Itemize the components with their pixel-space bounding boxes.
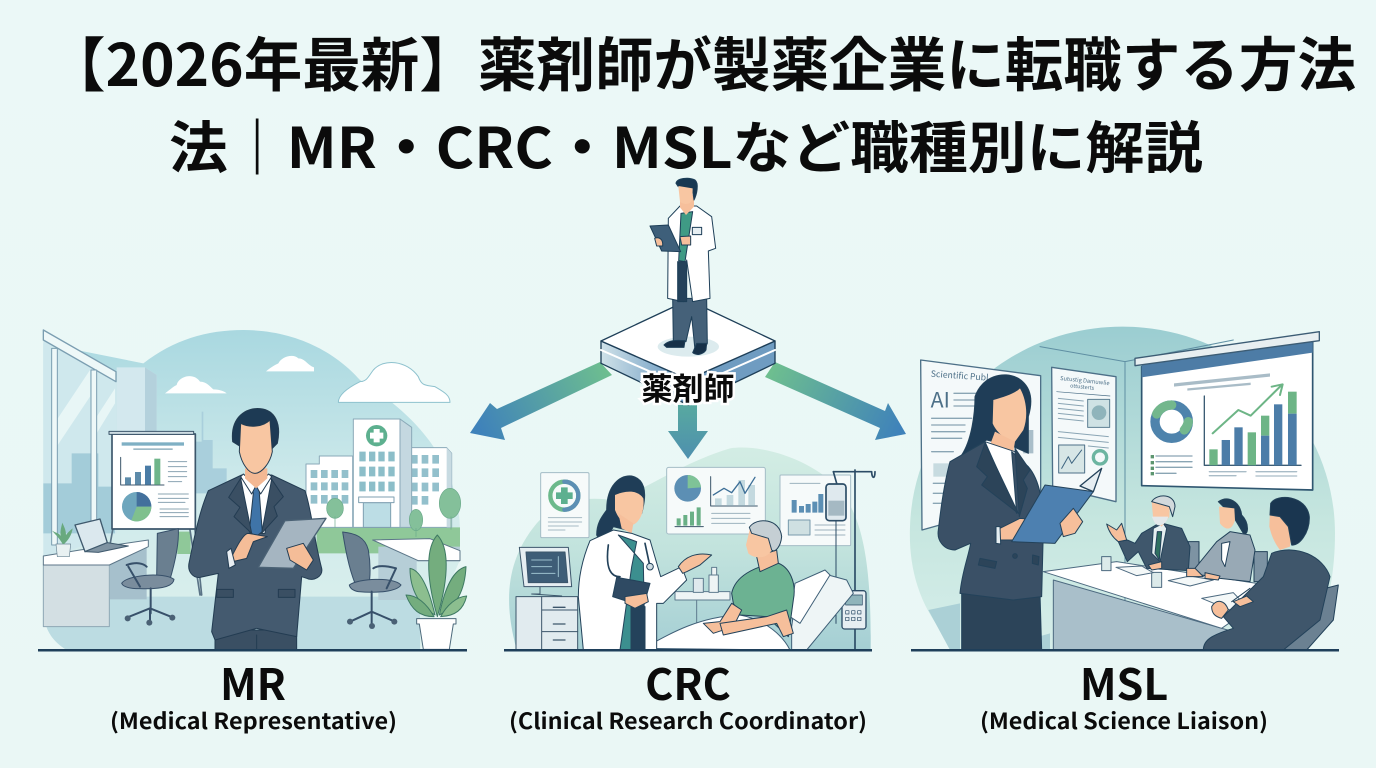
label: MSL: (Medical Science Liaison): [980, 704, 1268, 736]
title: [47, 18, 1356, 185]
backdrop blob: [43, 330, 460, 650]
lawn: [177, 527, 460, 554]
poster: second: ottusterts: [1070, 381, 1095, 392]
pharmacist: [650, 178, 716, 354]
potted plant: [406, 535, 467, 649]
office window and skyline: [43, 330, 227, 560]
bedside table: [675, 567, 730, 627]
wall chart right: [780, 475, 851, 546]
wall charts centre: [667, 467, 765, 534]
poster: Scientific Publication: Scientific Publ: [930, 368, 989, 384]
attendee: woman: [1187, 499, 1267, 582]
label: MR: [110, 651, 397, 736]
label: MSL: MSL: [1080, 651, 1168, 713]
panel: MSL scene: [910, 327, 1338, 650]
label: CRC: [509, 651, 867, 736]
clouds: [165, 356, 450, 402]
label: MR: MR: [220, 651, 286, 713]
ground line MR: [38, 649, 467, 652]
label: CRC: CRC: [645, 651, 731, 713]
patient: [703, 521, 794, 637]
label: CRC: (Clinical Research Coordinator): [509, 704, 867, 736]
desk with laptop and plant: [43, 519, 148, 627]
wall corner: [1040, 340, 1233, 650]
poster: Scientific Publication: AI: [931, 383, 950, 414]
nurse: [578, 476, 712, 650]
ground line MSL: [911, 649, 1339, 652]
arrow: to MR: [470, 362, 612, 440]
presenter woman: [938, 375, 1102, 650]
right desk and chair: [343, 532, 460, 629]
panel: CRC scene: [509, 448, 875, 650]
pharmacist on platform: [601, 178, 775, 405]
label: MR: (Medical Representative): [110, 704, 397, 736]
wall chart with cross icon: [541, 473, 589, 538]
iv stand: [826, 470, 875, 650]
title: 【2026年最新】薬剤師が製薬企業に転職する方法: [47, 18, 1356, 103]
poster: second: [1052, 367, 1116, 502]
backdrop blob: [509, 448, 871, 650]
poster: second: Sutustig Damuwlie: [1060, 373, 1110, 387]
poster: Scientific Publication: [921, 360, 1041, 530]
label: 薬剤師: 薬剤師: [642, 364, 734, 409]
backdrop blob: [910, 327, 1335, 650]
arrow: to MSL: [765, 362, 906, 440]
floor: [43, 597, 420, 650]
meeting table: [1043, 557, 1257, 650]
businessman: [189, 409, 326, 650]
title: 法｜MR・CRC・MSLなど職種別に解説: [169, 104, 1203, 185]
flip chart: [106, 431, 202, 595]
floor patch: [928, 603, 1050, 650]
patient bed: [643, 570, 853, 650]
label: MSL: [980, 651, 1268, 736]
ground line CRC: [504, 649, 872, 652]
monitor and cabinet: [516, 547, 578, 650]
platform: [601, 300, 775, 405]
attendee: man from behind with chair: [1203, 497, 1338, 650]
office chair left: [122, 529, 178, 626]
icon: hospital: [306, 419, 452, 527]
projection screen: [1135, 332, 1319, 490]
arrow: to CRC: [668, 405, 708, 459]
attendee: older man: [1107, 496, 1199, 573]
trees: [327, 488, 461, 537]
panel: MR scene: [43, 330, 467, 650]
